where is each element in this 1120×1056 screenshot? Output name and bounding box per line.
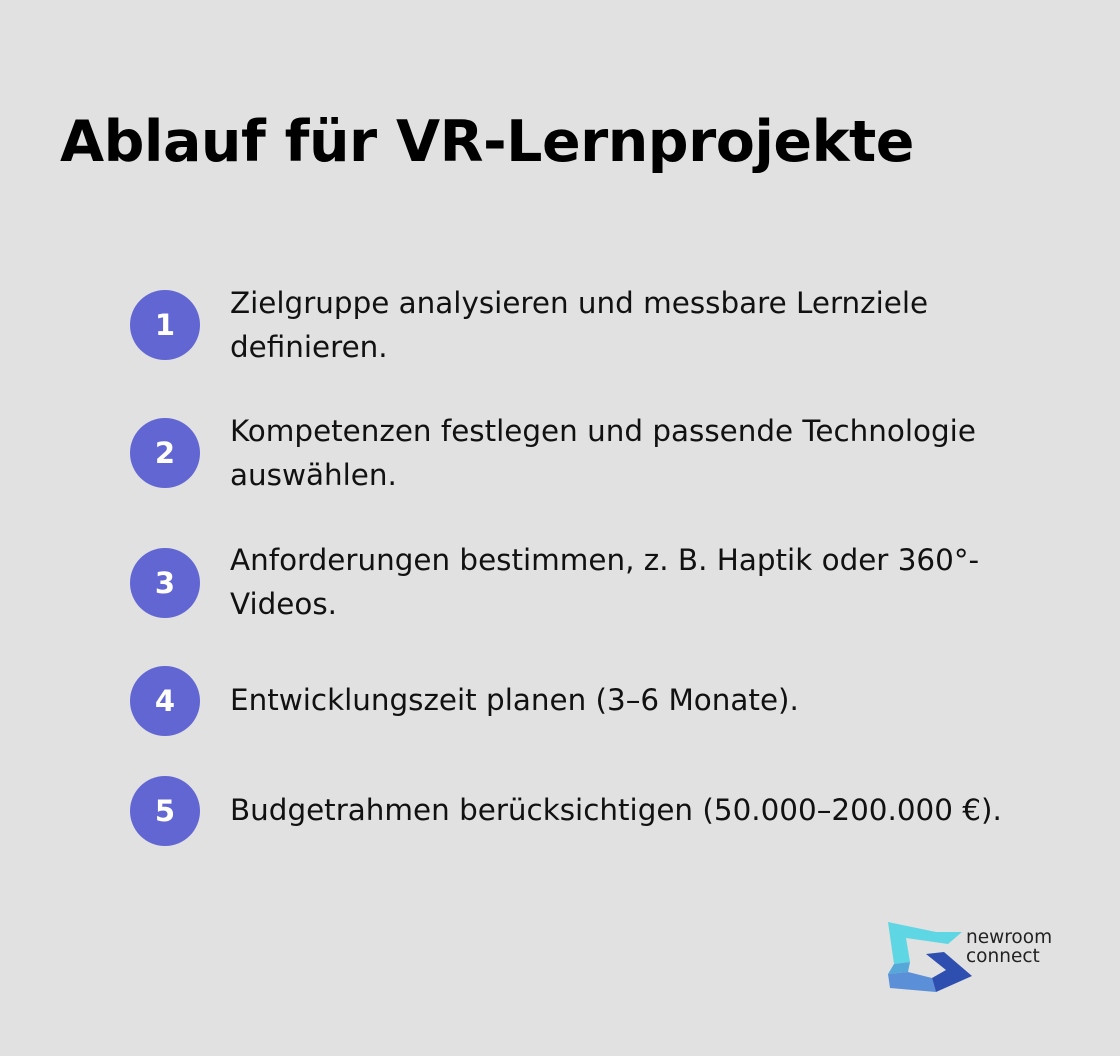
- text 2: [230, 414, 976, 492]
- step 4: [130, 666, 799, 736]
- logo text: newroom: [966, 927, 1052, 948]
- circle 2: 2: [155, 436, 175, 470]
- text 3: Videos.: [230, 587, 337, 621]
- circle 5: [130, 776, 200, 846]
- circle 2: [130, 418, 200, 488]
- logo: [888, 922, 1052, 992]
- text 4: Entwicklungszeit planen (3–6 Monate).: [230, 683, 799, 717]
- text 3: [230, 543, 979, 621]
- text 3: Anforderungen bestimmen, z. B. Haptik oder 360°-: [230, 543, 979, 577]
- text 1: Zielgruppe analysieren und messbare Lernziele: [230, 286, 928, 320]
- logo mark: [888, 922, 972, 992]
- circle 3: [130, 548, 200, 618]
- text 5: Budgetrahmen berücksichtigen (50.000–200.000 €).: [230, 793, 1002, 827]
- circle 4: 4: [155, 684, 175, 718]
- text 1: definieren.: [230, 330, 388, 364]
- circle 4: [130, 666, 200, 736]
- circle 1: 1: [155, 308, 175, 342]
- step 3: [130, 543, 979, 621]
- text 2: auswählen.: [230, 458, 397, 492]
- logo text: connect: [966, 946, 1040, 967]
- logo text: [966, 927, 1052, 967]
- circle 5: 5: [155, 794, 175, 828]
- step 2: [130, 414, 976, 492]
- text 1: [230, 286, 928, 364]
- step 5: [130, 776, 1002, 846]
- title: Ablauf für VR-Lernprojekte: [60, 109, 914, 175]
- text 2: Kompetenzen festlegen und passende Technologie: [230, 414, 976, 448]
- circle 3: 3: [155, 566, 175, 600]
- step 1: [130, 286, 928, 364]
- circle 1: [130, 290, 200, 360]
